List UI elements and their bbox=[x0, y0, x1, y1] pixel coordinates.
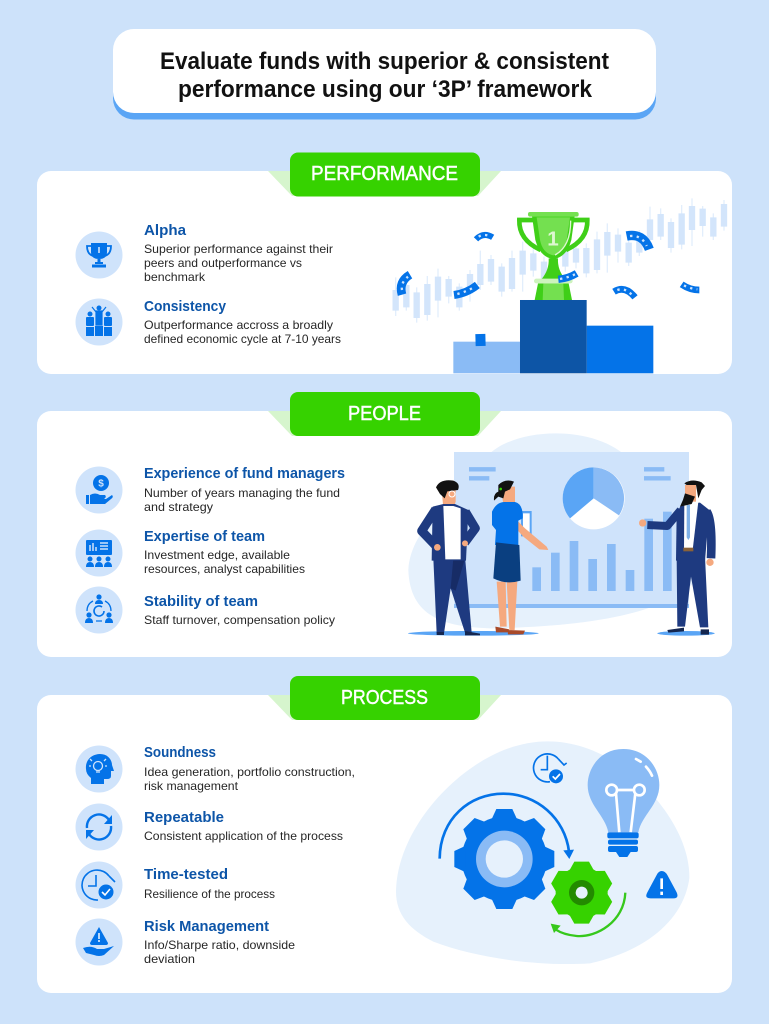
icon: circular arrows bbox=[86, 814, 112, 840]
presentation board bbox=[454, 452, 689, 608]
blue gear bbox=[454, 809, 554, 909]
illustration: gears and light bulb bbox=[396, 741, 689, 964]
icon: clock with check bbox=[82, 870, 115, 900]
clock icon bbox=[534, 754, 567, 783]
icon: team with presentation board bbox=[86, 540, 112, 567]
light bulb bbox=[588, 749, 659, 857]
item: time-tested: Time-tested bbox=[144, 866, 228, 883]
item: alpha bbox=[76, 222, 333, 284]
icon: hand holding coin bbox=[86, 475, 113, 504]
item: experience of fund managers: and strategy bbox=[144, 501, 213, 514]
icon: head with bulb bbox=[86, 754, 114, 784]
item: stability of team: Staff turnover, compensation policy bbox=[144, 614, 335, 627]
woman with tablet bbox=[492, 481, 548, 634]
trophy bbox=[519, 212, 587, 300]
item: alpha: peers and outperformance vs bbox=[144, 257, 302, 270]
ground shadows bbox=[408, 631, 715, 636]
blue rotation arrow bbox=[440, 794, 574, 859]
item: time-tested: Resilience of the process bbox=[144, 888, 275, 901]
green gear bbox=[549, 862, 615, 924]
candlestick chart bbox=[396, 198, 724, 323]
man with beard presenting bbox=[639, 481, 714, 635]
item: risk management bbox=[76, 918, 295, 966]
trophy: 1 bbox=[547, 227, 559, 250]
badge: performance: PERFORMANCE bbox=[311, 163, 458, 185]
item: repeatable: Consistent application of the process bbox=[144, 830, 343, 843]
item: experience of fund managers: Number of years managing the fund bbox=[144, 487, 340, 500]
panel: performance bbox=[37, 152, 732, 374]
item: consistency bbox=[76, 298, 341, 346]
panel: people bbox=[37, 392, 732, 657]
item: time-tested bbox=[76, 862, 275, 908]
badge: people: PEOPLE bbox=[348, 403, 421, 425]
item: soundness: Idea generation, portfolio construction, bbox=[144, 766, 355, 779]
item: soundness: Soundness bbox=[144, 744, 216, 761]
title card: Evaluate funds with superior & consistent bbox=[160, 48, 609, 75]
item: consistency: Outperformance accross a broadly bbox=[144, 319, 333, 332]
man with glasses bbox=[422, 480, 480, 635]
item: soundness bbox=[76, 744, 355, 793]
item: alpha: benchmark bbox=[144, 271, 205, 284]
item: expertise of team: Expertise of team bbox=[144, 528, 265, 545]
badge: people bbox=[268, 392, 501, 436]
item: expertise of team bbox=[76, 528, 305, 576]
item: alpha: Superior performance against their bbox=[144, 243, 333, 256]
background blob bbox=[396, 741, 689, 964]
illustration: team reviewing charts bbox=[408, 433, 715, 636]
item: stability of team: Stability of team bbox=[144, 593, 258, 610]
item: expertise of team: Investment edge, available bbox=[144, 549, 290, 562]
bar chart bbox=[532, 512, 672, 591]
icon: team cycle bbox=[85, 594, 113, 623]
badge: process: PROCESS bbox=[341, 687, 428, 709]
item: consistency: defined economic cycle at 7-10 years bbox=[144, 333, 341, 346]
title card: performance using our ‘3P’ framework bbox=[178, 76, 593, 103]
badge: process bbox=[268, 676, 501, 720]
badge: performance bbox=[268, 152, 501, 196]
flying money bills bbox=[401, 235, 699, 346]
item: stability of team bbox=[76, 586, 335, 634]
podium bbox=[453, 300, 653, 373]
item: soundness: risk management bbox=[144, 780, 239, 793]
item: risk management: Info/Sharpe ratio, downside bbox=[144, 939, 295, 952]
item: expertise of team: resources, analyst capabilities bbox=[144, 563, 305, 576]
icon: people on podium bbox=[86, 306, 112, 336]
panel: process bbox=[37, 676, 732, 993]
green rotation arrow bbox=[551, 893, 625, 936]
item: experience of fund managers bbox=[76, 465, 345, 514]
item: experience of fund managers: Experience of fund managers bbox=[144, 465, 345, 482]
icon: trophy bbox=[87, 243, 111, 268]
icon: hand with warning triangle bbox=[83, 927, 114, 956]
item: consistency: Consistency bbox=[144, 298, 227, 315]
item: repeatable bbox=[76, 804, 343, 850]
item: risk management: deviation bbox=[144, 953, 195, 966]
pie chart bbox=[563, 467, 625, 529]
illustration: trophy on podium with candlestick chart bbox=[396, 198, 724, 373]
icon: hand holding coin: $ bbox=[98, 478, 104, 490]
background blob bbox=[408, 433, 699, 628]
warning icon bbox=[646, 871, 677, 898]
item: risk management: Risk Management bbox=[144, 918, 269, 935]
item: alpha: Alpha bbox=[144, 222, 187, 239]
title card bbox=[113, 29, 656, 120]
item: repeatable: Repeatable bbox=[144, 809, 224, 826]
